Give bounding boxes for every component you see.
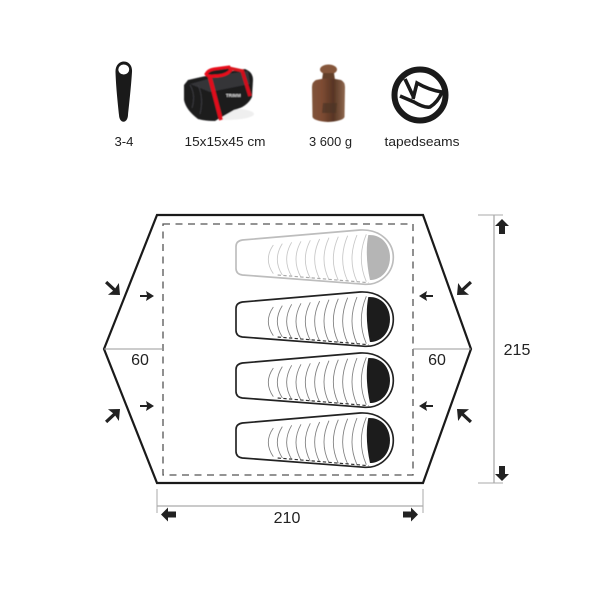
floor plan: inner tent dashed outline: [163, 224, 413, 475]
door arrow: upper left inner: [140, 291, 154, 301]
height dimension: 215: [478, 215, 530, 483]
door arrow: upper right inner: [419, 291, 433, 301]
vestibule depth right: 60: [413, 349, 471, 369]
height dimension: 215: 215: [504, 342, 530, 359]
label: weight: 3 600 g: [309, 134, 352, 149]
vestibule depth right: 60: 60: [428, 352, 446, 369]
icon: carry bag: [184, 67, 254, 121]
door arrow: upper left outer: [101, 276, 125, 301]
sleeping bag 4: [236, 413, 393, 467]
sleeping bag 3: [236, 353, 393, 407]
icon: sleeping bag capacity: [115, 62, 132, 122]
sleeping bag: empty place (grey): [236, 230, 393, 284]
label: capacity: 3-4: [114, 134, 134, 149]
vestibule depth left: 60: 60: [131, 352, 149, 369]
icon: taped seams: [394, 70, 446, 120]
sleeping bag 2: [236, 292, 393, 346]
door arrow: lower right inner: [419, 401, 433, 411]
icon: weight: [312, 64, 345, 122]
door arrow: lower right outer: [452, 403, 476, 428]
label: taped seams: tapedseams: [384, 134, 460, 149]
door arrow: lower left inner: [140, 401, 154, 411]
vestibule depth left: 60: [104, 349, 163, 369]
floor plan: tent outline: [104, 215, 471, 483]
width dimension: 210: 210: [274, 510, 300, 527]
icon: carry bag: TRIMM: [226, 93, 241, 98]
label: packed size: 15x15x45 cm: [184, 134, 266, 149]
door arrow: upper right outer: [452, 276, 476, 301]
width dimension: 210: [157, 489, 423, 527]
door arrow: lower left outer: [101, 403, 125, 428]
